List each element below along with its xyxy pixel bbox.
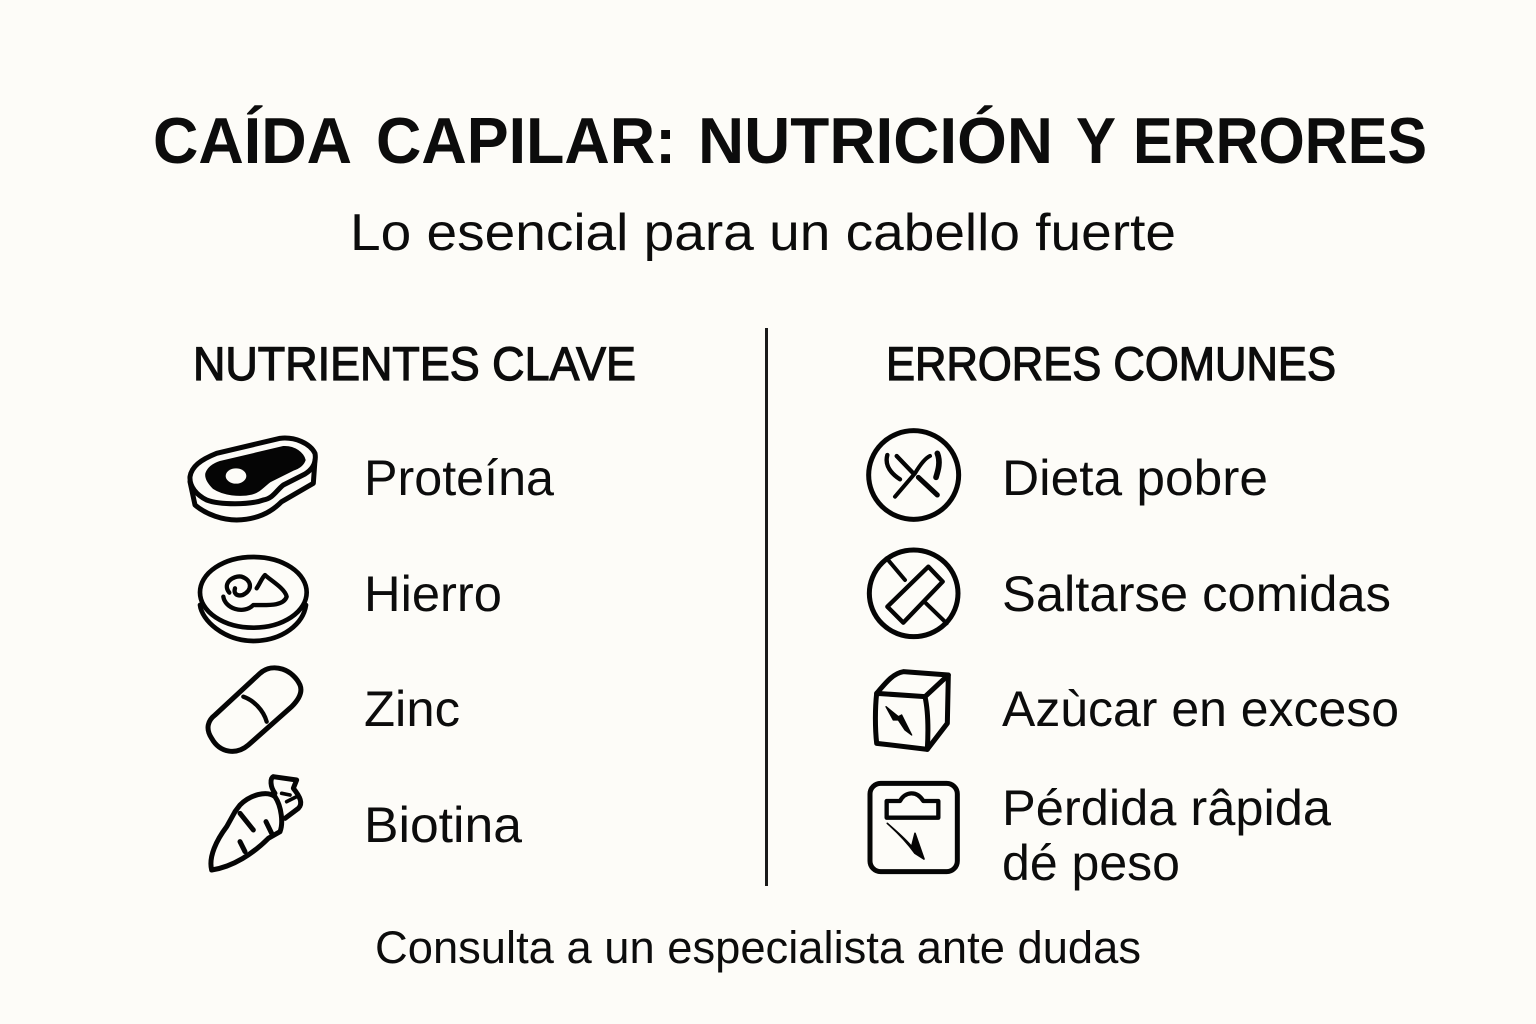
label: Biotina: Biotina: [364, 797, 522, 853]
label: Hierro: Hierro: [364, 566, 502, 622]
icon: crossed cutlery: [869, 431, 959, 519]
icon: pill: [208, 668, 301, 751]
label: Pérdida râpida dé peso: dé peso: [1002, 835, 1180, 891]
title: [153, 104, 1427, 177]
icon: sugar cube: [875, 672, 948, 749]
label: Dieta pobre: Dieta pobre: [1002, 450, 1268, 506]
footer note: Consulta a un especialista ante dudas: [375, 922, 1141, 973]
label: Pérdida râpida dé peso: Pérdida râpida: [1002, 780, 1331, 836]
icon: scale: [870, 783, 957, 872]
icon: skipped meal: [869, 550, 958, 637]
title: NUTRICIÓN: [698, 104, 1053, 177]
icon: carrot: [211, 777, 301, 870]
label: Proteína: Proteína: [364, 450, 554, 506]
title: ERRORES: [1133, 104, 1427, 177]
title: CAÍDA: [153, 104, 352, 177]
label: Azùcar en exceso: Azùcar en exceso: [1002, 681, 1399, 737]
heading: nutrientes clave: NUTRIENTES CLAVE: [193, 337, 636, 390]
label: Saltarse comidas: Saltarse comidas: [1002, 566, 1391, 622]
panel: errores comunes: [869, 431, 1399, 891]
title: Y: [1076, 104, 1116, 177]
subtitle: Lo esencial para un cabello fuerte: [350, 204, 1176, 262]
heading: errores comunes: ERRORES COMUNES: [886, 337, 1336, 390]
title: CAPILAR:: [376, 104, 676, 177]
icon: iron disc: [200, 557, 307, 641]
label: Zinc: Zinc: [364, 681, 460, 737]
panel: nutrientes clave: [190, 438, 554, 870]
label: Pérdida râpida dé peso: [1002, 780, 1331, 891]
icon: steak: [190, 438, 315, 520]
